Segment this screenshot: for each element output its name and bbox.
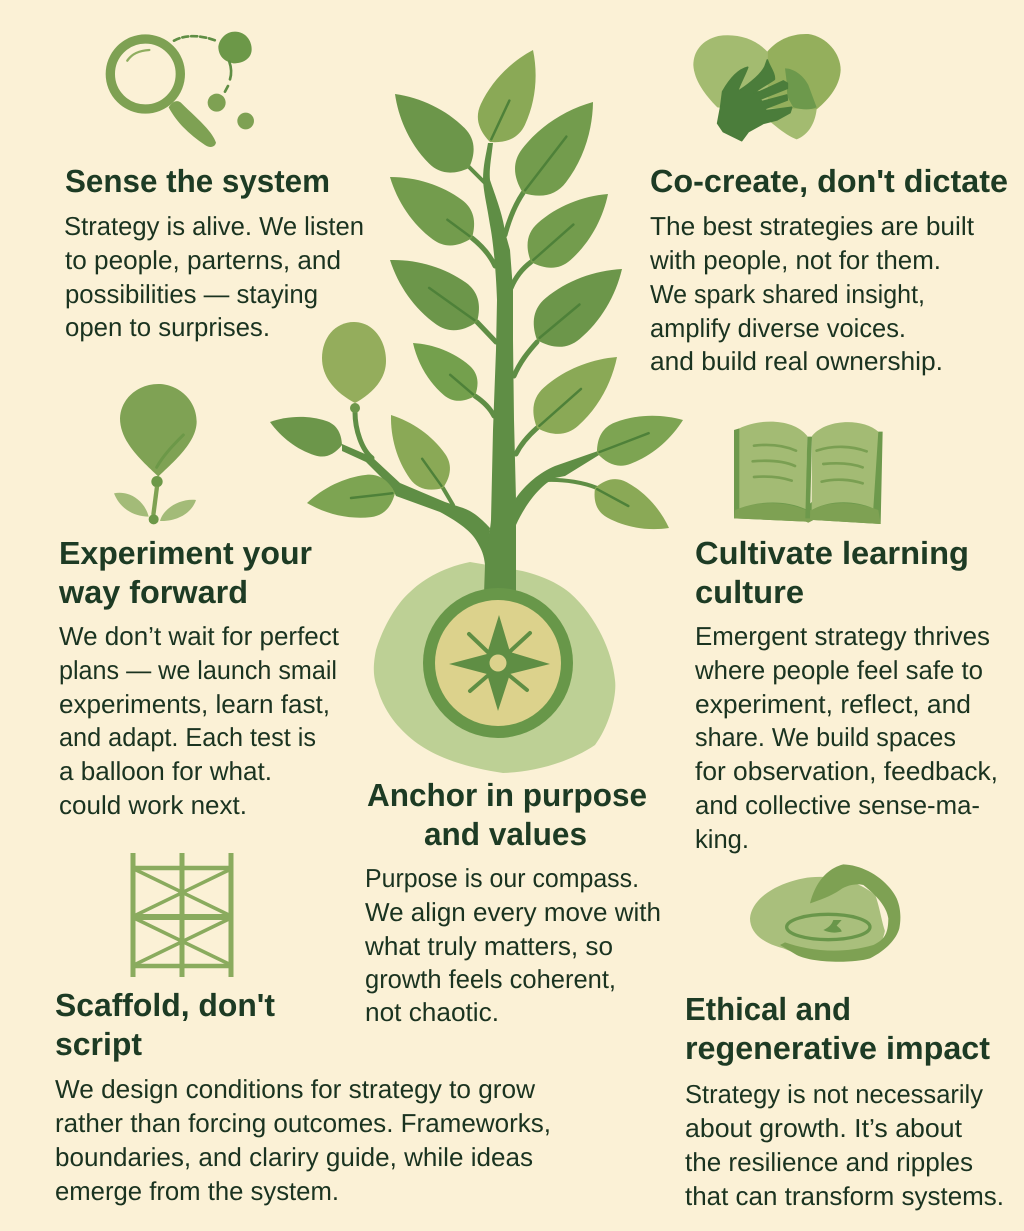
heading: Co-create, don't dictate — [650, 163, 1008, 199]
compass star — [449, 615, 550, 711]
icon: magnifying glass with dots — [110, 32, 254, 147]
heading — [367, 777, 647, 852]
balloon on branch — [322, 322, 386, 413]
central tree illustration — [264, 40, 691, 773]
heading: Scaffold, don't — [55, 987, 275, 1023]
text block: what truly matters, so — [364, 931, 613, 961]
text block: experiment, reflect, and — [695, 689, 971, 719]
text block: possibilities — staying — [65, 279, 318, 309]
text block: where people feel safe to — [694, 655, 983, 685]
text block: rather than forcing outcomes. Frameworks, — [55, 1108, 551, 1138]
text block: king. — [695, 824, 749, 854]
icon: balloon sprout — [114, 384, 197, 524]
heading: Ethical and — [685, 991, 851, 1027]
text block — [59, 621, 340, 820]
heading: way forward — [58, 574, 248, 610]
text block: the resilience and ripples — [685, 1147, 973, 1177]
text block: experiments, learn fast, — [59, 689, 330, 719]
text block: a balloon for what. — [59, 756, 272, 786]
text block: plans — we launch smail — [59, 655, 337, 685]
text block: open to surprises. — [65, 312, 270, 342]
text block: Purpose is our compass. — [365, 863, 639, 893]
leaves — [264, 40, 691, 546]
panel: experiment — [58, 384, 340, 820]
text block — [364, 863, 661, 1027]
tree stems — [342, 143, 599, 594]
text block — [64, 211, 364, 342]
icon: compass with sprout — [750, 864, 900, 962]
text block: could work next. — [59, 790, 247, 820]
panel: anchor in purpose — [364, 777, 661, 1027]
text block: Strategy is not necessarily — [685, 1079, 983, 1109]
heading — [685, 991, 990, 1066]
heading: Cultivate learning — [695, 535, 969, 571]
panel: scaffold — [55, 853, 551, 1206]
text block — [55, 1074, 551, 1206]
heading: Anchor in purpose — [367, 777, 647, 813]
heading: regenerative impact — [685, 1030, 990, 1066]
text block — [649, 211, 975, 376]
text block: We don’t wait for perfect — [59, 621, 340, 651]
soil blob — [374, 562, 615, 773]
text block: and collective sense-ma- — [695, 790, 980, 820]
panel: ethical impact — [685, 864, 1004, 1211]
heading — [695, 535, 969, 610]
text block: Strategy is alive. We listen — [64, 211, 364, 241]
text block: for observation, feedback, — [695, 756, 998, 786]
text block: amplify diverse voices. — [650, 313, 906, 343]
text block: boundaries, and clariry guide, while ideas — [55, 1142, 533, 1172]
text block — [685, 1079, 1004, 1211]
text block: We design conditions for strategy to grow — [55, 1074, 535, 1104]
panel: sense the system — [64, 32, 364, 342]
text block: The best strategies are built — [650, 211, 975, 241]
heading: Sense the system — [65, 163, 330, 199]
heading — [58, 535, 312, 610]
text block: about growth. It’s about — [685, 1113, 963, 1143]
heading — [55, 987, 275, 1062]
panel: co-create — [649, 34, 1008, 376]
text block: growth feels coherent, — [365, 964, 616, 994]
text block: Emergent strategy thrives — [695, 621, 990, 651]
text block: not chaotic. — [365, 997, 499, 1027]
icon: scaffold — [133, 853, 231, 977]
text block: We spark shared insight, — [650, 279, 925, 309]
text block: and adapt. Each test is — [59, 722, 316, 752]
compass — [423, 588, 573, 738]
heading: culture — [695, 574, 804, 610]
text block: to people, parterns, and — [65, 245, 341, 275]
text block: with people, not for them. — [649, 245, 941, 275]
icon: hands over heart — [693, 34, 841, 141]
text block: share. We build spaces — [695, 722, 956, 752]
icon: open book — [734, 422, 883, 524]
heading: Experiment your — [59, 535, 312, 571]
text block: and build real ownership. — [650, 346, 943, 376]
text block: that can transform systems. — [685, 1181, 1004, 1211]
text block: emerge from the system. — [55, 1176, 339, 1206]
text block — [694, 621, 998, 854]
heading: script — [55, 1026, 142, 1062]
text block: We align every move with — [365, 897, 661, 927]
heading: and values — [424, 816, 587, 852]
panel: cultivate learning — [694, 422, 998, 854]
